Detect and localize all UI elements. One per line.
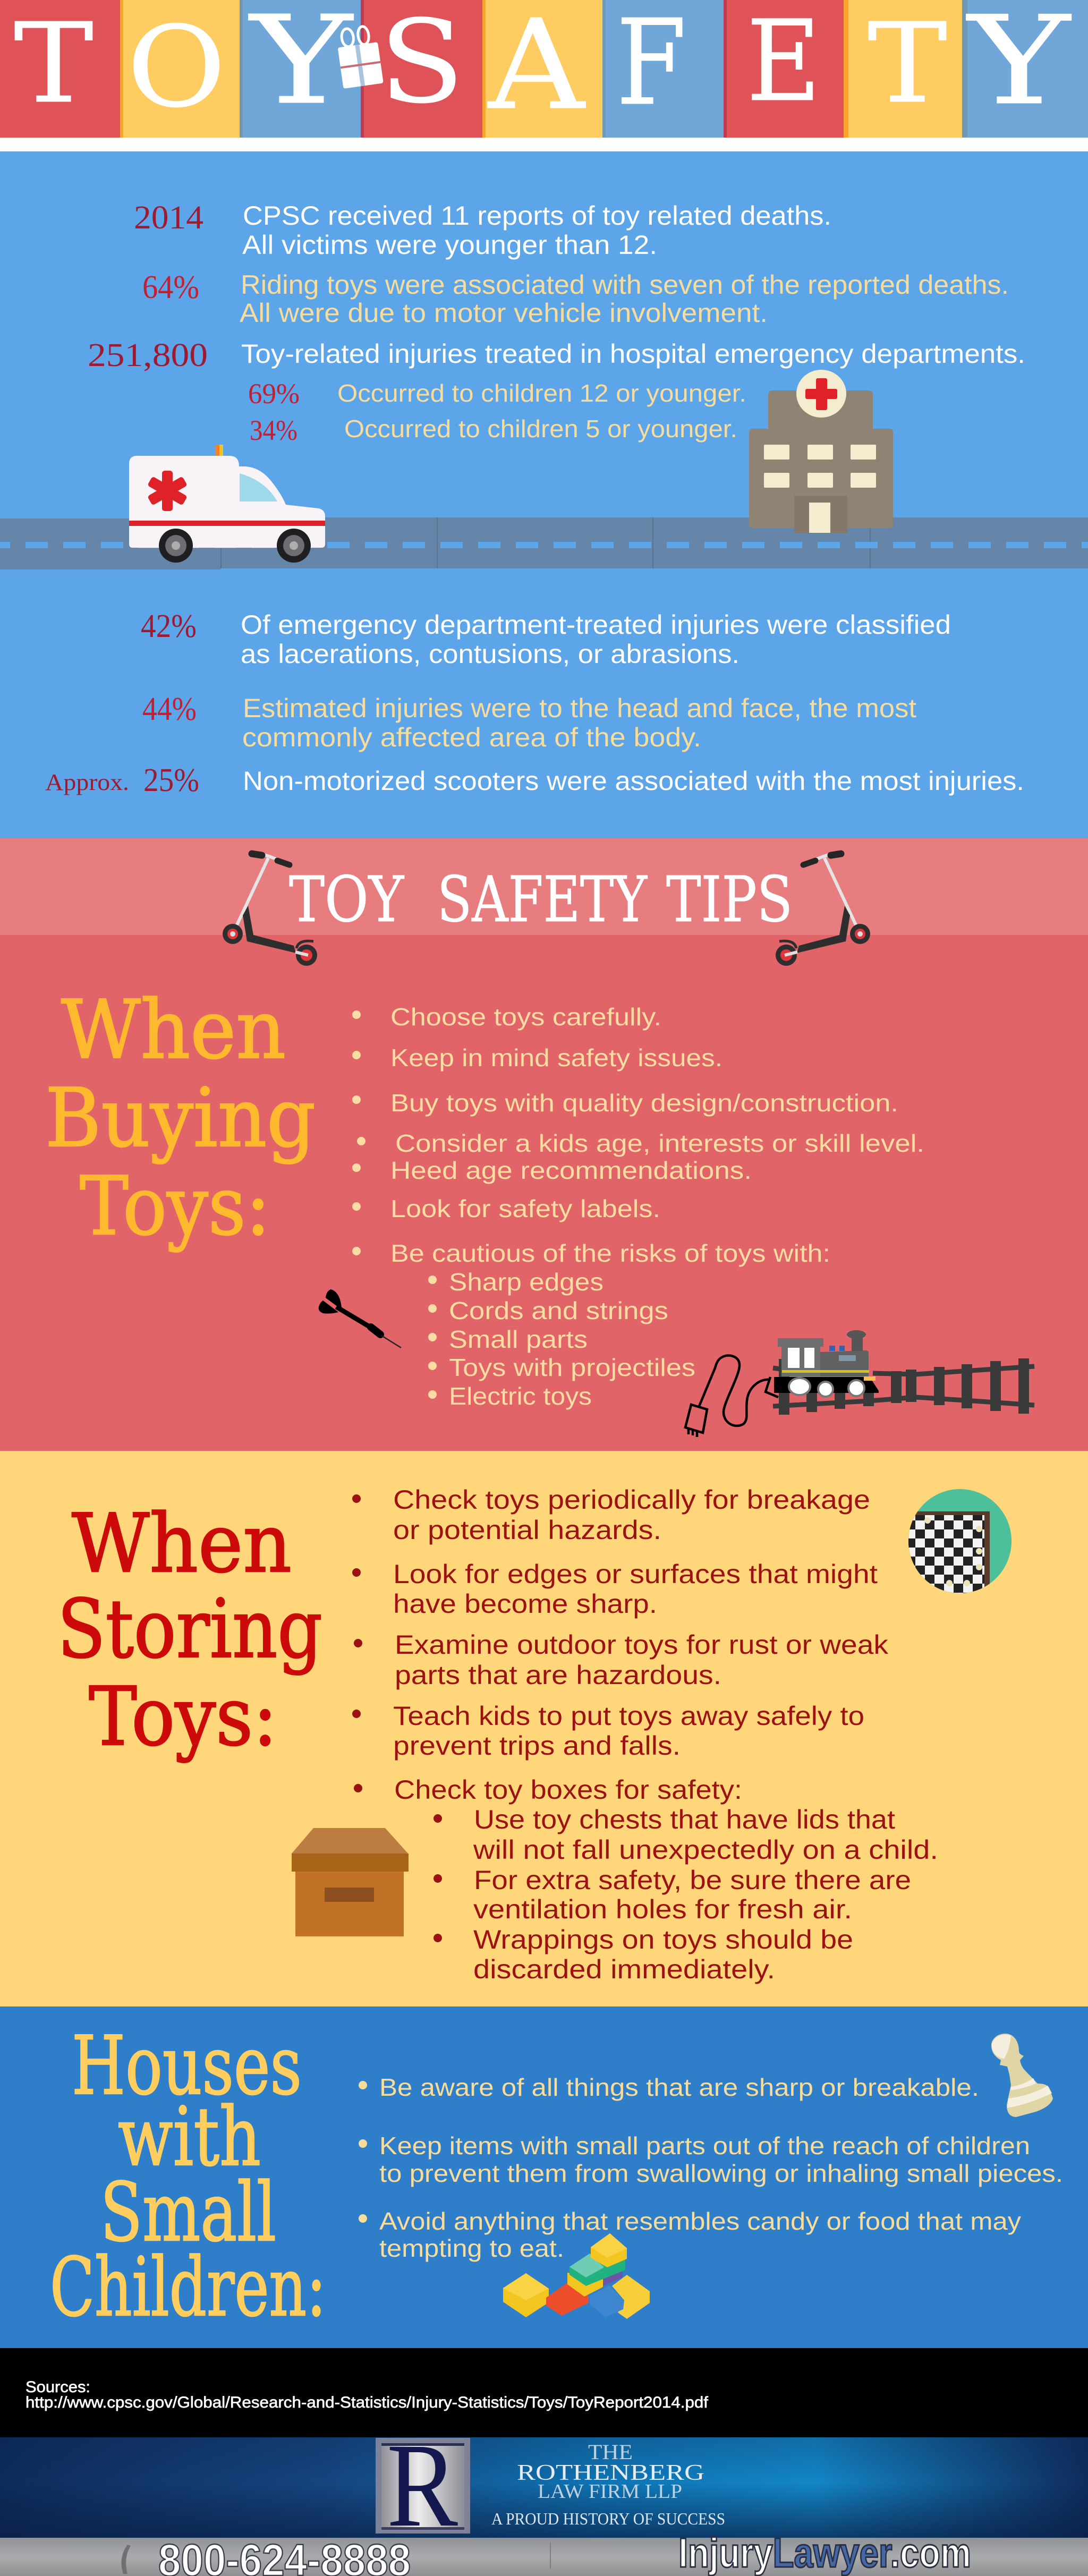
stat: 69%: Occurred to children 12 or younger. — [337, 379, 746, 407]
icon: ambulance — [129, 445, 325, 563]
stat: 2014 — [134, 200, 831, 260]
icon: phone — [121, 2545, 131, 2574]
list: storing tips: Examine outdoor toys for rust or weak — [395, 1630, 889, 1660]
stat: 34%: 34% — [250, 414, 298, 446]
list: storing tips: will not fall unexpectedly on a child. — [473, 1835, 938, 1865]
list: buying tips: Be cautious of the risks of toys with: — [390, 1239, 830, 1267]
list: buying tips: Consider a kids age, interests or skill level. — [395, 1129, 924, 1157]
stat: 44%: Estimated injuries were to the head and face, the most — [243, 693, 916, 723]
icon: checkers board — [906, 1489, 1012, 1596]
wheels — [159, 529, 311, 563]
list: household tips: to prevent them from swallowing or inhaling small pieces. — [379, 2160, 1063, 2187]
list: buying tips: Toys with projectiles — [449, 1354, 695, 1381]
stat: 251,800: 251,800 — [88, 337, 208, 373]
text: sources: http://www.cpsc.gov/Global/Research-and-Statistics/Injury-Statistics/Toys/ToyReport2014.pdf — [26, 2394, 709, 2411]
icon: hospital — [749, 370, 893, 533]
stat: 42%: 42% — [141, 608, 197, 644]
title: Toy Safety: T — [14, 0, 94, 127]
heading: houses with small children: Houses — [72, 2019, 302, 2113]
stat: 64%: 64% — [142, 269, 199, 305]
list: household tips: Keep items with small parts out of the reach of children — [379, 2132, 1030, 2160]
list: buying tips — [352, 1003, 924, 1410]
heading: when buying toys — [45, 983, 316, 1253]
list: storing tips: prevent trips and falls. — [393, 1731, 681, 1761]
panel: when buying toys — [0, 838, 1088, 1451]
text: firm name — [491, 2440, 725, 2528]
icon: right scooter — [776, 854, 870, 966]
cord and plug — [685, 1356, 778, 1437]
stat: 2014: 2014 — [134, 200, 203, 236]
list: storing tips: Look for edges or surfaces that might — [393, 1559, 878, 1589]
panel: sources — [0, 2348, 1088, 2437]
list: storing tips: discarded immediately. — [473, 1954, 775, 1984]
stat: approx 25%: 25% — [143, 762, 199, 798]
locomotive — [774, 1330, 879, 1397]
stat: 64%: All were due to motor vehicle involvement. — [240, 298, 768, 328]
heading: houses with small children — [50, 2019, 326, 2334]
icon: gift — [335, 24, 384, 89]
list: buying tips: Look for safety labels. — [390, 1195, 660, 1222]
stat: 44%: commonly affected area of the body. — [242, 722, 701, 752]
stat: approx 25%: Approx. — [45, 769, 129, 795]
stat: 64% — [142, 269, 1009, 328]
stat: 2014: All victims were younger than 12. — [242, 230, 657, 260]
heading: houses with small children: with — [118, 2090, 261, 2184]
text: firm name: ROTHENBERG — [517, 2461, 704, 2485]
list: storing tips: Teach kids to put toys away safely to — [393, 1701, 864, 1731]
website: InjuryLawyer.com — [678, 2529, 971, 2576]
list: household tips: Avoid anything that resembles candy or food that may — [379, 2207, 1021, 2235]
text: sources — [26, 2378, 709, 2411]
list: storing tips: parts that are hazardous. — [395, 1660, 721, 1690]
list: storing tips: For extra safety, be sure there are — [474, 1865, 911, 1895]
list: household tips: Be aware of all things that are sharp or breakable. — [379, 2073, 979, 2101]
heading: when buying toys: Toys: — [80, 1159, 270, 1253]
panel: law firm footer — [0, 2419, 1088, 2576]
stat: 44%: 44% — [142, 691, 197, 727]
stat: 69% — [248, 378, 746, 410]
stat: 64%: Riding toys were associated with seven of the reported deaths. — [241, 270, 1009, 300]
stat: 42%: Of emergency department-treated injuries were classified — [241, 610, 951, 640]
list: buying tips: Heed age recommendations. — [390, 1157, 752, 1184]
stat: approx 25% — [45, 762, 1024, 798]
stat: 34% — [250, 414, 737, 446]
icon: chess pawn — [991, 2034, 1053, 2117]
title: Toy Safety: T — [868, 0, 947, 127]
stat: 2014: CPSC received 11 reports of toy related deaths. — [243, 201, 831, 231]
icon: building blocks — [503, 2233, 650, 2319]
stat: 251,800 — [88, 337, 1025, 373]
heading: houses with small children: Children: — [50, 2240, 326, 2334]
heading: houses with small children: Small — [100, 2165, 276, 2259]
icon: red star of life — [148, 471, 187, 511]
text: firm name: THE — [588, 2440, 633, 2464]
list: storing tips: Check toys periodically for breakage — [393, 1485, 870, 1515]
panel: statistics — [0, 151, 1088, 838]
list: buying tips: Electric toys — [449, 1382, 592, 1410]
stat: 69%: 69% — [248, 378, 300, 410]
heading: toy safety tips: TOY — [289, 863, 404, 936]
list: buying tips: Choose toys carefully. — [390, 1003, 661, 1031]
heading: when buying toys: Buying — [45, 1071, 316, 1165]
list: buying tips: Cords and strings — [449, 1297, 668, 1324]
title: Toy Safety: O — [127, 2, 226, 132]
title: Toy Safety — [14, 0, 1072, 137]
list: storing tips: ventilation holes for fresh air. — [473, 1894, 852, 1924]
list: buying tips: Keep in mind safety issues. — [390, 1044, 722, 1072]
icon: left scooter — [223, 854, 317, 966]
title: Toy Safety: E — [746, 0, 821, 126]
icon: dart — [319, 1289, 401, 1348]
list: storing tips: Use toy chests that have lids that — [474, 1805, 895, 1834]
stat: 42%: as lacerations, contusions, or abrasions. — [241, 639, 740, 669]
heading: when storing toys: When — [72, 1497, 292, 1591]
panel: houses with small children — [0, 2007, 1088, 2348]
stat: 251,800: Toy-related injuries treated in hospital emergency departments. — [241, 339, 1025, 369]
panel: when storing toys — [0, 1451, 1088, 2007]
heading: when storing toys: Toys: — [89, 1670, 277, 1764]
text: firm name: LAW FIRM LLP — [538, 2480, 682, 2503]
list: buying tips: Buy toys with quality design/construction. — [390, 1089, 898, 1117]
list: storing tips: Wrappings on toys should be — [473, 1925, 853, 1954]
list: buying tips: Sharp edges — [449, 1268, 604, 1296]
road — [0, 517, 1088, 569]
list: storing tips — [352, 1485, 938, 1984]
logo: R monogram: R — [387, 2419, 458, 2552]
list: household tips: tempting to eat. — [379, 2234, 564, 2262]
stat: approx 25%: Non-motorized scooters were associated with the most injuries. — [243, 766, 1024, 796]
icon: electric train — [685, 1330, 1034, 1437]
list: storing tips: Check toy boxes for safety: — [394, 1775, 742, 1805]
text: sources: Sources: — [26, 2378, 90, 2396]
icon: toy box — [292, 1828, 409, 1936]
heading: toy safety tips: SAFETY — [437, 863, 648, 936]
stat: 44% — [142, 691, 916, 752]
contact bar — [0, 2529, 1088, 2576]
panel: title banner — [0, 0, 1088, 138]
heading: toy safety tips — [289, 863, 793, 936]
text: firm name: A PROUD HISTORY OF SUCCESS — [491, 2509, 725, 2528]
heading: when buying toys: When — [61, 983, 286, 1077]
track — [773, 1358, 1034, 1415]
list: storing tips: or potential hazards. — [393, 1515, 661, 1545]
heading: when storing toys: Storing — [57, 1582, 322, 1676]
list: storing tips: have become sharp. — [393, 1589, 657, 1619]
stat: 42% — [141, 608, 951, 669]
list: household tips — [359, 2073, 1063, 2262]
stat: 34%: Occurred to children 5 or younger. — [344, 415, 737, 443]
heading: when storing toys — [57, 1497, 322, 1764]
list: buying tips: Small parts — [449, 1325, 588, 1353]
heading: toy safety tips: TIPS — [666, 863, 793, 936]
